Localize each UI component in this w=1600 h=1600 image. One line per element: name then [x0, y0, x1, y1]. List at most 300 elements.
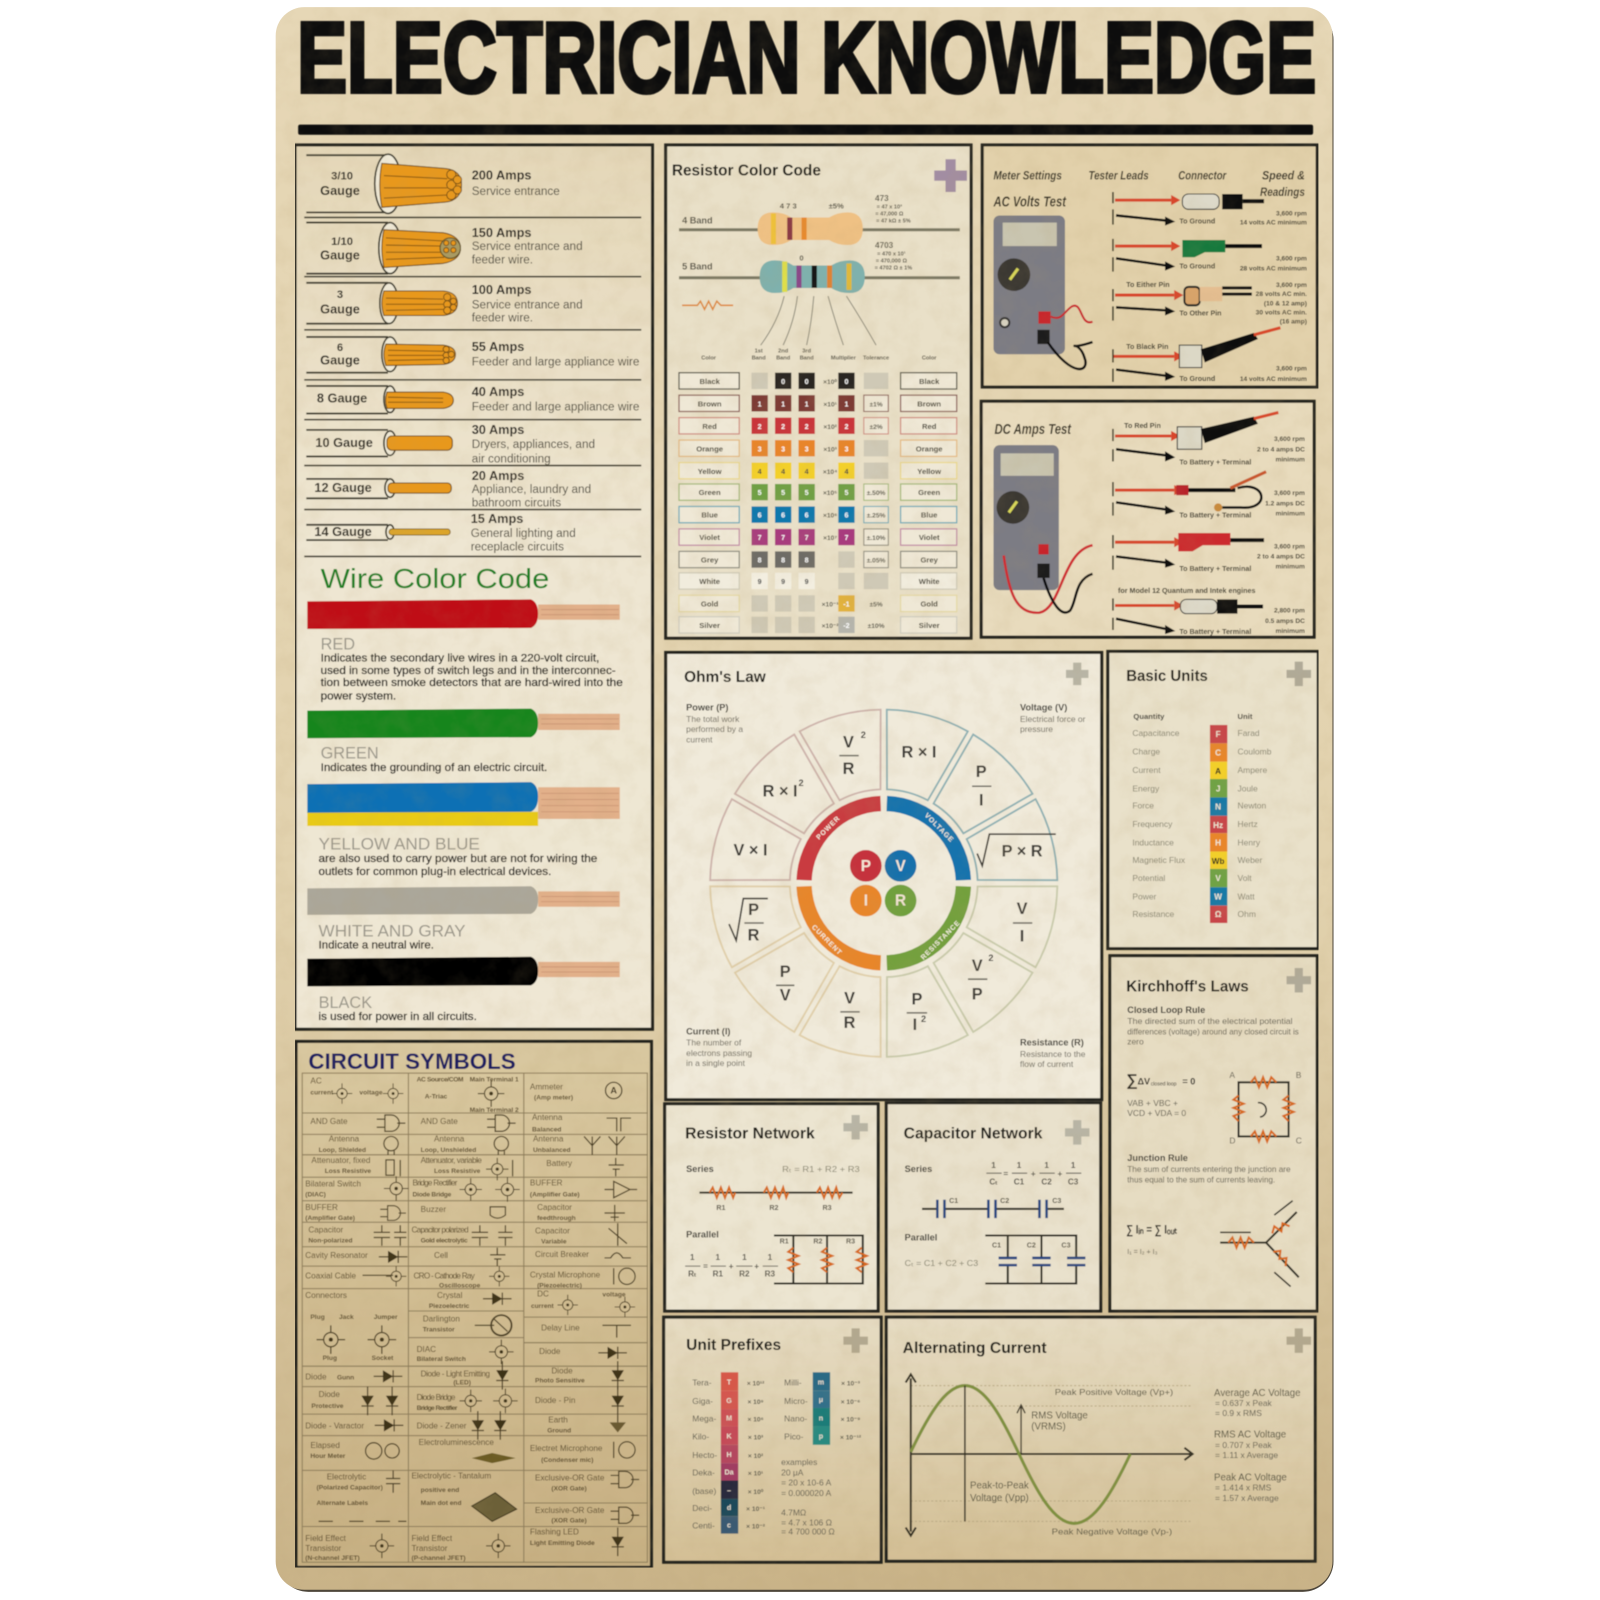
parallel resistors: = — [703, 1262, 708, 1271]
formulas: V — [1017, 900, 1028, 918]
series capacitors: C1 — [949, 1197, 958, 1205]
symbols column 1: Diode - Varactor — [305, 1421, 364, 1430]
AC volts heading: AC Volts Test — [993, 194, 1067, 210]
5 band resistor: 5 Band — [682, 262, 713, 272]
color table: Yellow — [917, 467, 941, 476]
junction equation: ∑ Iᵢₙ = ∑ Iₒᵤₜ — [1126, 1222, 1178, 1236]
prefix column large: c — [727, 1522, 731, 1530]
symbols column 3: Photo Sensitive — [535, 1378, 585, 1385]
series capacitors: Cₜ — [989, 1177, 998, 1186]
voltage formulas: = 1.414 x RMS — [1215, 1483, 1272, 1493]
gauge row 8: 8 Gauge — [317, 390, 367, 405]
series capacitors: C3 — [1052, 1197, 1061, 1205]
symbols column 3: Balanced — [532, 1126, 561, 1133]
sine wave chart: (VRMS) — [1031, 1421, 1066, 1432]
prefix column small: Milli- — [784, 1378, 802, 1388]
prefix column small: × 10⁻⁶ — [841, 1399, 860, 1406]
prefix column large: d — [727, 1504, 731, 1512]
panel: capacitor network — [886, 1103, 1101, 1311]
DC connector row 4: 2,800 rpm — [1274, 608, 1305, 615]
color table: ±5% — [869, 602, 883, 609]
voltage formulas: Peak AC Voltage — [1214, 1473, 1287, 1484]
color table: -1 — [843, 601, 850, 609]
prefix examples: 4.7MΩ — [781, 1507, 806, 1517]
parallel resistors: R2 — [739, 1269, 750, 1278]
panel: resistor network — [665, 1104, 878, 1311]
units table: Weber — [1238, 855, 1262, 865]
parallel capacitors: C1 — [992, 1242, 1001, 1250]
symbols column 2: Diode Bridge — [413, 1192, 452, 1199]
parallel resistors: 1 — [716, 1253, 721, 1262]
panel: Kirchhoff's laws — [1110, 956, 1317, 1311]
gauge row 3: Gauge — [320, 301, 360, 316]
units table: Magnetic Flux — [1132, 855, 1186, 865]
gauge row 3/10: 3/10 — [331, 171, 353, 183]
4 band resistor: = 47,000 Ω — [875, 211, 904, 217]
units table: Capacitance — [1132, 728, 1180, 738]
color table: 5 — [844, 489, 848, 497]
parallel resistors: R3 — [765, 1269, 776, 1278]
units table: Volt — [1238, 873, 1252, 883]
prefix examples: = 0.000020 A — [781, 1488, 832, 1498]
symbols column 3: BUFFER — [530, 1178, 563, 1187]
color table: ×10² — [823, 424, 838, 431]
formulas: P — [976, 763, 987, 781]
units table: Henry — [1238, 837, 1261, 847]
symbols column 3: Ground — [547, 1428, 571, 1435]
DC connector row 2 — [1113, 472, 1305, 520]
panel: resistor color code — [666, 145, 971, 638]
parallel resistors: 1 — [768, 1253, 773, 1262]
red text — [321, 635, 623, 702]
color table: ±1% — [869, 401, 883, 408]
symbols column 3: feedthrough — [537, 1215, 576, 1222]
junction rule text: Junction Rule — [1127, 1153, 1188, 1163]
symbols column 3: Capacitor — [537, 1203, 572, 1212]
formulas: 2 — [988, 953, 993, 963]
junction equation — [1126, 1222, 1178, 1256]
DC connector row 1: To Red Pin — [1124, 422, 1161, 430]
prefix column large: × 10⁶ — [748, 1416, 764, 1423]
units table: V — [1215, 874, 1221, 883]
gauge row 12: Appliance, laundry and — [472, 483, 591, 496]
prefix column large: × 10³ — [748, 1435, 764, 1442]
units table: Farad — [1238, 728, 1260, 738]
color table: 1 — [781, 400, 785, 408]
color table: 6 — [805, 512, 809, 520]
series capacitors — [905, 1161, 1081, 1219]
column headings — [993, 169, 1305, 199]
color table: Black — [919, 377, 940, 386]
color table: Blue — [701, 511, 718, 520]
units table: Frequency — [1132, 819, 1173, 829]
color table: 5 — [781, 489, 785, 497]
symbols column 3: Antenna — [533, 1135, 564, 1144]
5 band resistor: = 470,000 Ω — [876, 258, 907, 264]
prefix column large — [692, 1372, 766, 1534]
prefix column large: G — [726, 1397, 732, 1405]
gauge row 3/10: 200 Amps — [472, 168, 531, 183]
parallel resistors: + — [729, 1262, 734, 1271]
icon: plus — [934, 159, 967, 192]
color table: 7 — [781, 534, 785, 542]
DC connector row 1: To Battery + Terminal — [1179, 459, 1251, 467]
parallel capacitors: Parallel — [905, 1233, 937, 1243]
prefix column small: × 10⁻⁹ — [841, 1416, 860, 1423]
DC connector row 3 — [1113, 533, 1305, 573]
AC connector row 4: 3,600 rpm — [1276, 366, 1307, 373]
closed loop diagram: D — [1229, 1136, 1235, 1146]
series capacitors: C3 — [1068, 1177, 1079, 1186]
prefix column large: M — [726, 1414, 732, 1422]
AC connector row 2 — [1113, 239, 1307, 273]
formulas: P — [780, 963, 791, 981]
units table: H — [1215, 838, 1221, 847]
resistor heading: Resistor Color Code — [672, 163, 821, 180]
legend: voltage: Voltage (V) — [1020, 703, 1067, 713]
current wedges — [710, 886, 881, 1057]
formulas: P — [972, 986, 983, 1004]
color table: 0 — [805, 378, 809, 386]
symbols column 2: Piezoelectric — [429, 1303, 470, 1310]
units table: N — [1215, 803, 1221, 812]
symbols grid — [302, 1073, 647, 1562]
ring labels: POWER — [815, 815, 842, 841]
legend: resistance: Resistance to the — [1020, 1049, 1086, 1059]
gauge row 3: feeder wire. — [472, 312, 533, 325]
color table: Orange — [696, 444, 723, 453]
closed loop rule text: differences (voltage) around any closed circuit is — [1127, 1026, 1299, 1036]
closed loop equation: = 0 — [1182, 1076, 1195, 1086]
color table: Grey — [701, 556, 719, 565]
symbols column 3: DC — [537, 1290, 549, 1299]
DC connector row 2: 1.2 amps DC — [1265, 500, 1305, 507]
center disks: V — [895, 858, 906, 875]
symbols column 2: Buzzer — [421, 1205, 446, 1214]
voltage formulas: RMS AC Voltage — [1214, 1430, 1286, 1441]
legend: power: Power (P) — [686, 703, 728, 713]
prefix column large: Hecto- — [692, 1450, 717, 1460]
series resistors: R2 — [769, 1204, 779, 1212]
gauge row 6: 6 — [337, 342, 343, 354]
gauge row 3/10: Gauge — [320, 183, 360, 198]
symbols column 3: Earth — [548, 1415, 568, 1424]
prefix column small: × 10⁻¹² — [840, 1435, 862, 1442]
units table: Ampere — [1238, 765, 1267, 775]
units table: Coulomb — [1238, 747, 1272, 757]
symbols column 1: Diode — [319, 1390, 340, 1399]
symbols column 3: Diode — [551, 1366, 573, 1375]
parallel resistors — [685, 1230, 867, 1283]
AC connector row 1: 3,600 rpm — [1276, 210, 1307, 217]
column headers: Band — [800, 355, 814, 361]
AC connector row 3: 30 volts AC min. — [1256, 309, 1307, 316]
green text: GREEN — [321, 745, 379, 763]
units table: Ohm — [1238, 909, 1256, 919]
icon: plus — [1287, 662, 1311, 686]
red text: power system. — [321, 690, 396, 702]
wire: black — [307, 957, 620, 986]
parallel resistors: R1 — [780, 1238, 789, 1246]
color table: 2 — [805, 423, 809, 431]
parallel resistors: 1 — [742, 1253, 747, 1262]
column headings: Connector — [1178, 169, 1227, 183]
closed loop diagram: C — [1296, 1136, 1302, 1146]
formulas: V × I — [733, 842, 768, 860]
yellow and blue text: are also used to carry power but are not for wiring the — [319, 853, 597, 865]
center disks — [850, 850, 916, 916]
symbols column 1: Protective — [311, 1403, 344, 1410]
symbols column 3: Electret Microphone — [530, 1444, 603, 1453]
closed loop rule text: Closed Loop Rule — [1127, 1005, 1205, 1015]
units table: W — [1214, 893, 1222, 902]
symbols column 1: Non-polarized — [308, 1238, 353, 1245]
black text: is used for power in all circuits. — [319, 1011, 477, 1023]
prefix column large: K — [726, 1433, 732, 1441]
closed loop equation: ∑ — [1126, 1071, 1138, 1089]
symbols column 3: Ammeter — [530, 1082, 563, 1091]
junction diagram — [1220, 1201, 1299, 1287]
DC connector row 3: 3,600 rpm — [1274, 543, 1305, 550]
DC connector row 2: To Battery + Terminal — [1179, 512, 1251, 520]
units table: Inductance — [1132, 837, 1174, 847]
AC connector row 2: To Ground — [1179, 263, 1215, 271]
red text: tion between smoke detectors that are hard-wired into the — [321, 677, 623, 689]
DC connector row 4: 0.5 amps DC — [1265, 618, 1305, 625]
ring labels: VOLTAGE — [923, 812, 955, 844]
wire: blue and yellow — [307, 782, 620, 826]
symbols column 2: Gold electrolytic — [421, 1238, 468, 1245]
symbols column 2: Cell — [434, 1251, 448, 1260]
white and gray text: WHITE AND GRAY — [319, 922, 466, 940]
prefix column large: × 10⁻² — [746, 1524, 766, 1531]
symbols column 1: Coaxial Cable — [305, 1271, 357, 1280]
icon: plus — [843, 1328, 868, 1353]
DC connector row 4: minimum — [1275, 628, 1305, 635]
units table — [1132, 712, 1272, 923]
column headers: Tolerance — [863, 355, 889, 361]
DC connector row 4 — [1113, 587, 1305, 636]
symbols column 3: Antenna — [532, 1113, 563, 1122]
symbols column 3: Exclusive-OR Gate — [535, 1474, 605, 1483]
symbols column 3: (Piezoelectric) — [537, 1283, 582, 1290]
prefix column large: × 10¹² — [747, 1381, 765, 1388]
yellow and blue text — [319, 836, 597, 878]
symbols column 2: Diode - Zener — [417, 1421, 467, 1430]
gauge row 10: 30 Amps — [472, 422, 524, 437]
legend: current: in a single point — [686, 1058, 746, 1068]
formulas: V — [843, 733, 854, 751]
formulas: V — [972, 957, 983, 975]
symbols column 1: Jack — [339, 1314, 354, 1321]
red text: used in some types of switch legs and in the interconnec- — [321, 665, 616, 677]
panel: circuit symbols — [296, 1041, 651, 1567]
column headings: Meter Settings — [993, 169, 1062, 183]
symbols column 2: Transistor — [423, 1326, 455, 1333]
gauge row 12: 12 Gauge — [314, 480, 372, 495]
prefix column small: n — [819, 1414, 823, 1422]
symbols column 2: Bilateral Switch — [417, 1356, 466, 1363]
symbols column 2: Bridge Rectifier — [413, 1178, 458, 1187]
legend: power — [686, 703, 743, 744]
column headers: Color — [701, 355, 717, 361]
icon: plus — [843, 1115, 868, 1140]
symbols column 1 — [305, 1076, 408, 1562]
gauge row 14: receplacle circuits — [471, 540, 564, 553]
series resistors: R1 — [716, 1204, 725, 1212]
DC connector row 2: minimum — [1275, 511, 1305, 518]
color table: 7 — [758, 534, 762, 542]
voltage formulas: Average AC Voltage — [1214, 1388, 1301, 1399]
symbols column 3: Capacitor — [535, 1226, 570, 1235]
color table: ×10⁻² — [822, 623, 839, 630]
junction equation: I₁ = I₂ + I₃ — [1127, 1248, 1158, 1256]
white and gray text: Indicate a neutral wire. — [319, 940, 434, 952]
AC connector row 4: To Black Pin — [1126, 343, 1168, 351]
gauge row 1/10: Service entrance and — [472, 240, 583, 253]
prefix examples: = 4.7 x 106 Ω — [781, 1517, 832, 1527]
color table: ×10⁻¹ — [822, 602, 839, 609]
parallel capacitors: C3 — [1061, 1242, 1071, 1250]
formulas: P — [748, 901, 759, 919]
color table: 9 — [781, 578, 785, 586]
prefix column large: Tera- — [692, 1378, 712, 1388]
formulas: R — [843, 760, 855, 778]
prefix column large: Mega- — [692, 1413, 716, 1423]
color table: Gold — [920, 600, 938, 609]
symbols column 2: Main Terminal 2 — [470, 1107, 519, 1114]
junction rule text — [1127, 1153, 1291, 1184]
symbols column 2: Loss Resistive — [434, 1168, 481, 1175]
symbols column 1: (Amplifier Gate) — [305, 1215, 355, 1222]
color table: Gold — [701, 600, 719, 609]
4 band resistor: 473 — [875, 194, 889, 203]
parallel resistors: + — [754, 1262, 759, 1271]
units table: Resistance — [1132, 909, 1175, 919]
band leader lines — [761, 296, 876, 345]
sine wave chart: Peak-to-Peak — [970, 1481, 1029, 1492]
gauge row 6: 55 Amps — [472, 339, 524, 354]
sign shadow edge — [278, 9, 1334, 1592]
DC connector row 3: 2 to 4 amps DC — [1257, 554, 1305, 561]
units table: Ω — [1215, 910, 1222, 919]
5 band resistor: = 4702 Ω ± 1% — [875, 266, 912, 272]
symbols column 3 — [530, 1082, 639, 1556]
color table: Green — [918, 488, 941, 497]
color table: ±.25% — [867, 513, 886, 520]
series capacitors: C2 — [1000, 1197, 1009, 1205]
sine wave chart: Voltage (Vpp) — [970, 1493, 1029, 1504]
color table: 4 — [781, 468, 785, 476]
color table: Grey — [920, 556, 939, 565]
symbols column 3: Diode — [539, 1347, 561, 1356]
color table: 3 — [758, 445, 762, 453]
units table: Current — [1132, 765, 1161, 775]
prefix column large: × 10² — [748, 1453, 764, 1460]
column headers: 3rd — [802, 348, 812, 354]
color table: ×10⁶ — [823, 513, 837, 520]
icon: multimeter — [993, 215, 1093, 369]
AC connector row 3: (16 amp) — [1280, 319, 1307, 326]
column headers — [701, 348, 937, 361]
series capacitors: + — [1057, 1169, 1062, 1178]
parallel capacitors: C2 — [1027, 1242, 1036, 1250]
units table: Hertz — [1238, 819, 1258, 829]
color table: 3 — [844, 445, 848, 453]
color table: Silver — [699, 621, 720, 630]
prefix column small: p — [819, 1433, 824, 1441]
color table: 3 — [781, 445, 785, 453]
color table: 1 — [844, 400, 848, 408]
color table: 4 — [805, 468, 809, 476]
formulas: R × I — [901, 744, 936, 762]
icon: plus — [1065, 1120, 1089, 1145]
DC connector row 4: To Battery + Terminal — [1179, 628, 1251, 636]
parallel resistors: R2 — [813, 1238, 822, 1246]
units table: C — [1215, 749, 1221, 758]
symbols column 1: Electrolytic — [327, 1473, 366, 1482]
prefix examples: = 4 700 000 Ω — [781, 1527, 835, 1537]
ring labels: CURRENT — [810, 924, 843, 957]
color table: 5 — [758, 489, 762, 497]
formulas: I — [913, 1016, 917, 1034]
color table: Red — [702, 422, 717, 431]
prefix column large: Da — [724, 1468, 735, 1476]
symbols column 3: Unbalanced — [533, 1147, 571, 1154]
color table: ±10% — [868, 623, 885, 630]
symbols column 1: Gunn — [337, 1374, 354, 1381]
symbols column 3: Variable — [541, 1239, 567, 1246]
column headers: Band — [752, 355, 766, 361]
gauge row 3: Service entrance and — [472, 298, 583, 311]
symbols column 1: current — [310, 1090, 334, 1097]
series resistors: R3 — [823, 1204, 832, 1212]
closed loop rule text: The directed sum of the electrical potential — [1127, 1016, 1293, 1026]
prefix column small: Micro- — [784, 1396, 808, 1406]
AC connector row 3: To Either Pin — [1126, 281, 1170, 289]
color ring — [804, 804, 963, 963]
parallel capacitors: Cₜ = C1 + C2 + C3 — [905, 1258, 978, 1268]
prefix column large: T — [727, 1379, 732, 1387]
symbols column 2: Diode - Light Emitting — [421, 1369, 491, 1378]
gauge row 3/10: Service entrance — [472, 185, 560, 198]
units table: Unit — [1238, 712, 1253, 721]
closed loop diagram — [1229, 1070, 1302, 1146]
symbols column 1: Capacitor — [308, 1225, 344, 1234]
resistor schematic symbol — [682, 301, 733, 309]
parallel resistors: R1 — [713, 1269, 723, 1278]
symbols column 1: Jumper — [374, 1314, 398, 1321]
symbols column 3: Exclusive-OR Gate — [535, 1506, 605, 1515]
symbols column 3: A — [610, 1086, 617, 1096]
color table: Silver — [919, 621, 940, 630]
5 band resistor: 4703 — [875, 241, 894, 250]
wire color code heading: Wire Color Code — [321, 563, 549, 594]
symbols column 1: Cavity Resonator — [305, 1251, 368, 1260]
AC connector row 1: 14 volts AC minimum — [1240, 220, 1307, 227]
color table: 7 — [844, 534, 848, 542]
color table: 2 — [781, 423, 785, 431]
color table: 8 — [758, 557, 762, 565]
4 band resistor: 4 Band — [682, 216, 713, 226]
color table: 6 — [781, 512, 785, 520]
formulas: I — [979, 792, 984, 810]
closed loop diagram: A — [1229, 1070, 1235, 1080]
units table: Charge — [1132, 747, 1160, 757]
units table: Watt — [1238, 892, 1255, 902]
prefix column large: × 10⁻¹ — [746, 1506, 765, 1513]
color table: -2 — [843, 622, 850, 630]
